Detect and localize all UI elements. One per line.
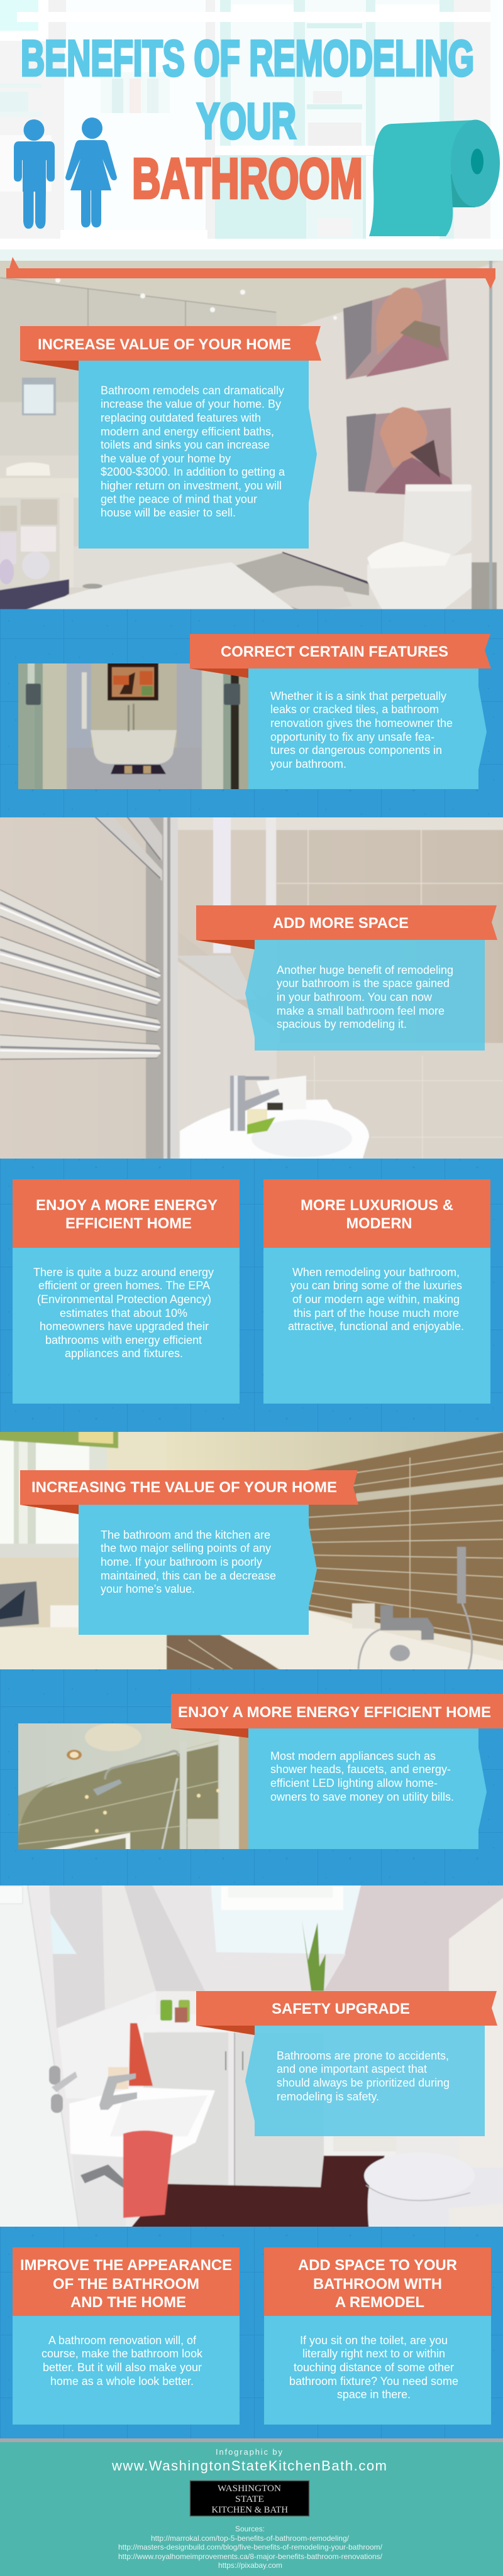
blue tile background [0, 609, 503, 817]
basin [69, 2087, 215, 2159]
panel: increase value of your home [20, 326, 321, 548]
body text: house will be easier to sell. [101, 506, 236, 519]
body text: make a small bathroom feel more [277, 1005, 445, 1017]
text panel [79, 361, 317, 548]
ribbon fold [196, 940, 255, 949]
blue tile background [0, 1669, 503, 1886]
blue tile background [0, 2227, 503, 2438]
floor [131, 2155, 385, 2227]
footer [0, 2438, 503, 2576]
body text: increase the value of your home. By [101, 398, 281, 410]
tap and soap [108, 2067, 128, 2089]
sources: http://masters-designbuild.com/blog/five-benefits-of-remodeling-your-bathroom/ [118, 2543, 383, 2551]
card: add space with a remodel [264, 2247, 491, 2425]
logo: KITCHEN & BATH [211, 2505, 288, 2515]
panel: correct certain features [0, 609, 503, 817]
icon: toilet paper roll [369, 119, 500, 236]
card: add space with a remodel: If you sit on the toilet, are you [300, 2334, 448, 2347]
text panel [79, 1505, 317, 1635]
card: add space with a remodel: bathroom fixture? You need some [289, 2375, 458, 2388]
ribbon heading [196, 1991, 497, 2026]
card: luxurious and modern: When remodeling your bathroom, [292, 1266, 460, 1279]
body text: opportunity to fix any unsafe fea- [270, 731, 434, 743]
sources: Sources: [235, 2524, 265, 2533]
body text: renovation gives the homeowner the [270, 717, 453, 729]
logo: WASHINGTON [218, 2484, 281, 2494]
body text: should always be prioritized during [277, 2077, 450, 2089]
card: add space with a remodel: touching distance of some other [294, 2361, 454, 2374]
card: add space with a remodel: A REMODEL [335, 2294, 424, 2311]
door handle [49, 2066, 60, 2085]
body text: maintained, this can be a decrease [101, 1569, 276, 1582]
ribbon fold [20, 361, 79, 371]
soap holder and tap [257, 1076, 306, 1110]
card: add space with a remodel: ADD SPACE TO YOUR [298, 2257, 457, 2274]
card: improve the appearance [13, 2247, 240, 2425]
body text: your bathroom. [270, 758, 346, 770]
card: energy efficient home [13, 1179, 240, 1404]
card: energy efficient home: ENJOY A MORE ENERGY [36, 1197, 218, 1214]
body text [270, 1750, 454, 1803]
title: YOUR [197, 93, 296, 149]
ribbon heading: CORRECT CERTAIN FEATURES [221, 643, 448, 660]
body text: The bathroom and the kitchen are [101, 1529, 270, 1541]
text panel [245, 940, 485, 1051]
ribbon fold [196, 2026, 255, 2035]
photo: freestanding tub through doors [15, 660, 252, 793]
chrome rails [0, 888, 160, 1059]
body text: home. If your bathroom is poorly [101, 1556, 262, 1568]
logo [190, 2480, 309, 2516]
ribbon heading [20, 326, 321, 361]
body text [101, 1529, 276, 1595]
body text [270, 690, 453, 770]
ribbon heading: ENJOY A MORE ENERGY EFFICIENT HOME [178, 1704, 491, 1721]
blue tile background [0, 1159, 503, 1432]
title: BATHROOM [132, 148, 363, 210]
top ribbon [6, 257, 495, 289]
body text: leaks or cracked tiles, a bathroom [270, 703, 439, 716]
body text: $2000-$3000. In addition to getting a [101, 466, 285, 478]
body text: Another huge benefit of remodeling [277, 964, 453, 976]
body text: your home’s value. [101, 1583, 195, 1595]
text panel [248, 669, 487, 789]
text panel [245, 2026, 485, 2136]
body text: the two major selling points of any [101, 1542, 271, 1554]
logo: STATE [235, 2494, 264, 2504]
panel: safety upgrade [0, 1882, 503, 2231]
card: improve the appearance: course, make the bathroom look [41, 2347, 203, 2360]
title [21, 30, 474, 210]
card: improve the appearance: home as a whole look better. [50, 2375, 194, 2388]
sources: http://www.royalhomeimprovements.ca/8-major-benefits-bathroom-renovations/ [118, 2552, 383, 2561]
panel: add more space [0, 814, 503, 1162]
credit text [111, 2447, 387, 2474]
text panel [248, 1728, 487, 1849]
icon: woman [65, 117, 117, 227]
ribbon heading [20, 1470, 358, 1505]
card: luxurious and modern: this part of the house much more [294, 1307, 459, 1319]
ribbon heading [190, 634, 491, 669]
card: improve the appearance: OF THE BATHROOM [53, 2276, 199, 2293]
tile joint lines [167, 1451, 503, 1669]
header panel [0, 0, 503, 261]
card: improve the appearance: A bathroom renovation will, of [48, 2334, 197, 2347]
toilet [367, 2185, 406, 2227]
sources: http://marrokal.com/top-5-benefits-of-bathroom-remodeling/ [151, 2534, 350, 2543]
sink [180, 1100, 369, 1162]
ribbon fold [20, 1505, 79, 1514]
ribbon fold [190, 669, 248, 678]
ribbon fold [171, 1728, 248, 1738]
body text: Bathrooms are prone to accidents, [277, 2049, 449, 2062]
body text: toilets and sinks you can increase [101, 439, 270, 451]
body text [101, 385, 285, 519]
body text: get the peace of mind that your [101, 493, 257, 505]
ribbon heading [196, 905, 497, 940]
sources: https://pixabay.com [218, 2561, 282, 2570]
ribbon heading: SAFETY UPGRADE [272, 2000, 410, 2017]
card: add space with a remodel: space in there. [337, 2388, 411, 2401]
photo: rain shower [15, 1720, 252, 1852]
header background illustration [0, 0, 503, 261]
card: luxurious and modern [263, 1179, 490, 1404]
card: improve the appearance: AND THE HOME [70, 2294, 186, 2311]
body text: Most modern appliances such as [270, 1750, 436, 1762]
credit text: www.WashingtonStateKitchenBath.com [111, 2458, 387, 2474]
card: energy efficient home: (Environmental Protection Agency) [37, 1293, 211, 1306]
body text: Bathroom remodels can dramatically [101, 385, 284, 397]
footer background [0, 2438, 503, 2576]
body text [277, 2049, 450, 2103]
card: energy efficient home: estimates that about 10% [60, 1307, 187, 1319]
body text: replacing outdated features with [101, 412, 261, 424]
card: energy efficient home: homeowners have upgraded their [40, 1320, 209, 1333]
body text: spacious by remodeling it. [277, 1018, 407, 1030]
body text: tures or dangerous components in [270, 744, 442, 756]
body text: owners to save money on utility bills. [270, 1791, 454, 1803]
ribbon heading: INCREASE VALUE OF YOUR HOME [38, 336, 291, 353]
card: energy efficient home: bathrooms with energy efficient [45, 1334, 202, 1346]
card: improve the appearance: IMPROVE THE APPEARANCE [20, 2257, 232, 2274]
body text: higher return on investment, you will [101, 479, 282, 492]
photo: white attic bathroom [0, 1882, 503, 2231]
body text: modern and energy efficient baths, [101, 425, 274, 438]
card: luxurious and modern: of our modern age within, making [292, 1293, 460, 1306]
card: luxurious and modern: MODERN [346, 1215, 412, 1232]
credit text: Infographic by [216, 2447, 283, 2457]
body text [277, 964, 453, 1030]
panel: enjoy a more energy efficient home [0, 1669, 503, 1886]
body text: in your bathroom. You can now [277, 991, 433, 1003]
door [0, 1882, 79, 2231]
card: luxurious and modern: attractive, functional and enjoyable. [288, 1320, 464, 1333]
card: luxurious and modern: MORE LUXURIOUS & [301, 1197, 453, 1214]
ribbon heading [171, 1694, 503, 1728]
photo: towel rail and sink [0, 814, 503, 1162]
body text: shower heads, faucets, and energy- [270, 1763, 451, 1776]
ribbon heading: INCREASING THE VALUE OF YOUR HOME [31, 1479, 337, 1496]
ribbon heading: ADD MORE SPACE [273, 915, 409, 932]
card: energy efficient home: efficient or green homes. The EPA [38, 1279, 210, 1292]
panel: two cards energy and luxury [0, 1159, 503, 1432]
panel: two cards appearance and space [0, 2227, 503, 2438]
body text: your bathroom is the space gained [277, 977, 450, 990]
body text: the value of your home by [101, 452, 231, 465]
flower tile art [343, 279, 452, 494]
photo section: vanity and toilet [0, 258, 503, 613]
card: improve the appearance: better. But it will also make your [43, 2361, 202, 2374]
panel: increasing the value of your home [0, 1429, 503, 1674]
body text: remodeling is safety. [277, 2090, 379, 2103]
photo: tiled bathroom [0, 258, 503, 613]
wall below basin [72, 2155, 126, 2231]
card: energy efficient home: EFFICIENT HOME [65, 1215, 192, 1232]
card: energy efficient home: There is quite a buzz around energy [33, 1266, 214, 1279]
photo: brown tiled bath [0, 1429, 503, 1674]
body text: efficient LED lighting allow home- [270, 1777, 438, 1789]
sources [118, 2524, 383, 2570]
card: energy efficient home: appliances and fixtures. [65, 1347, 183, 1360]
card: add space with a remodel: BATHROOM WITH [313, 2276, 442, 2293]
card: add space with a remodel: literally right next to or within [302, 2347, 445, 2360]
body text: and one important aspect that [277, 2063, 427, 2075]
icon: man [14, 119, 55, 229]
top rails [93, 817, 162, 881]
body text: Whether it is a sink that perpetually [270, 690, 446, 702]
toilet [367, 484, 497, 613]
card: luxurious and modern: you can bring some of the luxuries [290, 1279, 462, 1292]
